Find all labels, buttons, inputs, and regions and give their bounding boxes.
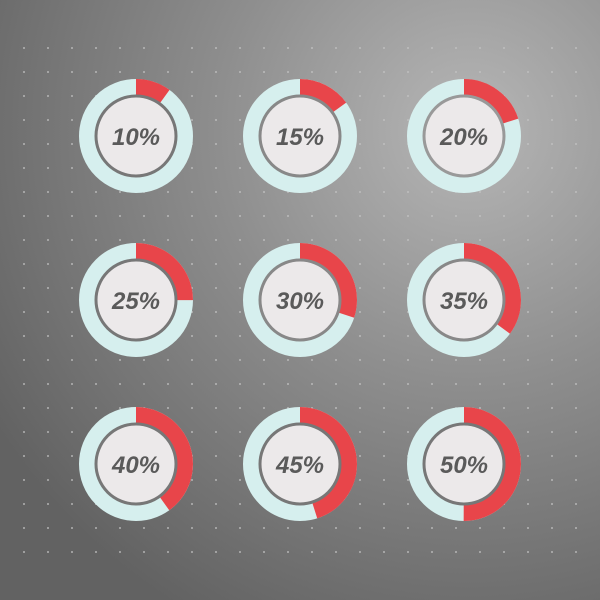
donut: 45%: 45% xyxy=(275,452,324,479)
donut: 40% xyxy=(87,415,185,513)
donut: 15% xyxy=(251,87,349,185)
donut: 20% xyxy=(415,87,513,185)
donut: 25% xyxy=(87,251,185,349)
donut: 20%: 20% xyxy=(439,124,488,151)
donut: 45% xyxy=(251,415,349,513)
donut: 50% xyxy=(415,415,513,513)
donut: 30% xyxy=(251,251,349,349)
donut: 10%: 10% xyxy=(112,124,160,151)
donut: 25%: 25% xyxy=(111,288,160,315)
donut: 30%: 30% xyxy=(276,288,324,315)
donut: 40%: 40% xyxy=(111,452,160,479)
donut: 50%: 50% xyxy=(440,452,488,479)
donut: 15%: 15% xyxy=(276,124,324,151)
donut: 35%: 35% xyxy=(440,288,488,315)
donut: 35% xyxy=(415,251,513,349)
donut: 10% xyxy=(87,87,185,185)
